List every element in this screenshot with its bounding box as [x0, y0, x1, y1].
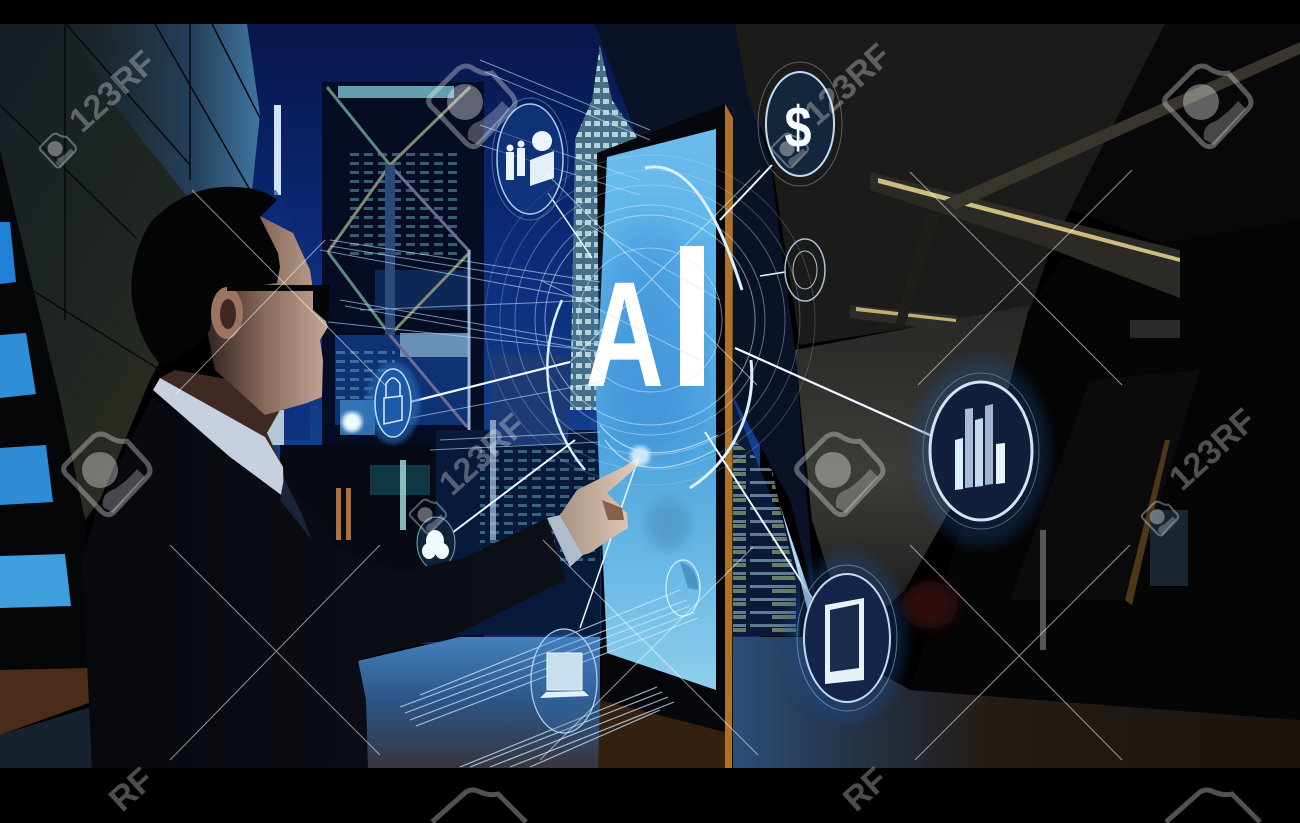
- icon: empty ring: [785, 239, 825, 301]
- skyscraper behind man: [322, 82, 484, 642]
- left blue lit windows: [0, 222, 71, 608]
- terrace floor: [0, 637, 1300, 768]
- AI label: A: [585, 250, 664, 418]
- icon: small ring on screen: [666, 560, 700, 616]
- holographic rings around screen: [485, 155, 815, 488]
- kiosk body: [597, 104, 733, 768]
- connector lines: [310, 60, 932, 767]
- ear: [211, 287, 243, 339]
- neck: [160, 370, 290, 467]
- left stone building: [0, 24, 260, 735]
- icon: tablet: [787, 552, 907, 724]
- kiosk with AI screen: [585, 104, 733, 768]
- night sky: [240, 24, 760, 644]
- glasses: [227, 285, 330, 323]
- suit and arm: [82, 397, 566, 768]
- kiosk wood base: [598, 700, 725, 768]
- right dark building with ceiling panels: [735, 24, 1300, 720]
- icon: laptop: [531, 629, 597, 733]
- tie: [280, 478, 312, 540]
- touch glow: [630, 446, 650, 466]
- icon: people: [492, 98, 568, 220]
- cuff: [547, 515, 583, 567]
- hand reflection: [646, 498, 690, 550]
- dark fin behind kiosk: [595, 24, 815, 600]
- watermarks: 123RF: [1162, 401, 1263, 498]
- icon: bar chart: [913, 358, 1049, 546]
- city towers and lights: [262, 105, 835, 655]
- tower behind kiosk: [570, 45, 637, 410]
- man: [82, 187, 640, 768]
- icon: dollar: $: [784, 95, 812, 160]
- watermarks: 123RF: [62, 43, 163, 140]
- kiosk screen: [596, 129, 716, 690]
- hand: [560, 456, 640, 555]
- watermarks: 123RF: [797, 36, 898, 133]
- icon: cloud: [417, 517, 455, 569]
- folded fingers: [602, 500, 624, 520]
- shirt collar: [153, 378, 284, 497]
- icon: dollar: [758, 62, 842, 186]
- watermarks: 123RF: [432, 406, 533, 503]
- watermarks: RF: [102, 760, 161, 819]
- watermark lines: [170, 170, 1132, 760]
- face: [205, 215, 328, 415]
- hair: [131, 187, 280, 367]
- watermarks: RF: [836, 760, 895, 819]
- icon: padlock: [366, 362, 420, 444]
- kiosk orange edge: [725, 104, 733, 768]
- top letterbox bar: [0, 0, 1300, 24]
